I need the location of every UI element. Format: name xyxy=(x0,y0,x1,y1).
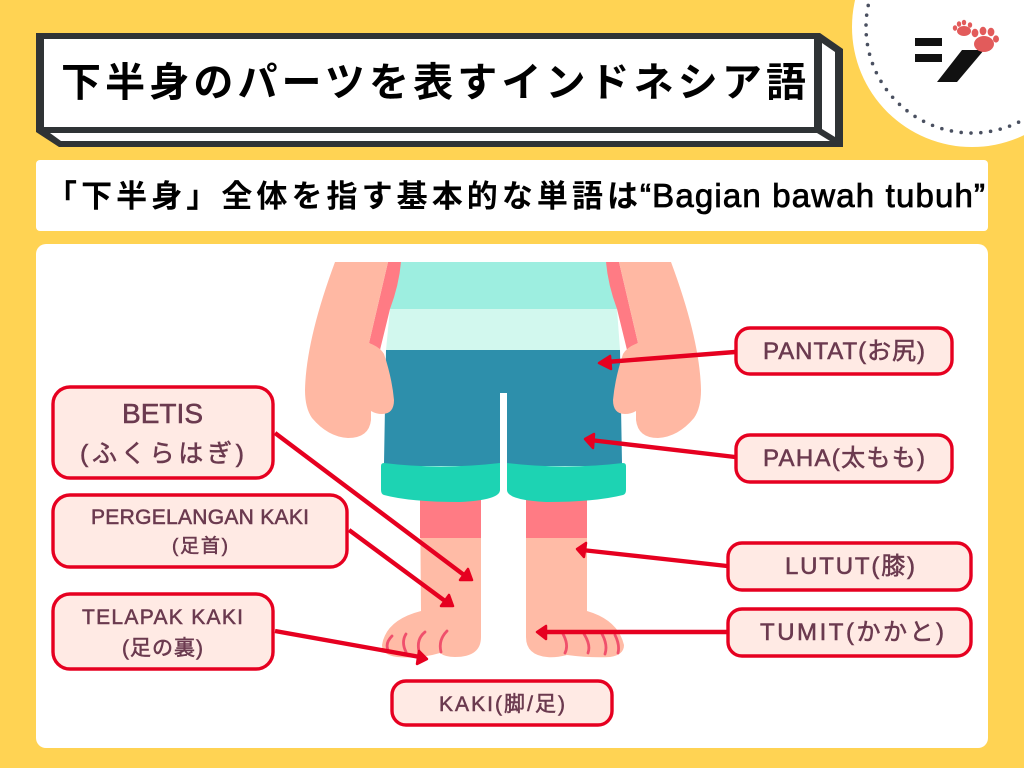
label: TELAPAK KAKI: (足の裏) xyxy=(122,637,203,660)
cuffs xyxy=(381,463,626,502)
subtitle panel xyxy=(36,160,988,231)
label: PERGELANGAN KAKI xyxy=(53,495,347,567)
label: TUMIT xyxy=(728,609,971,656)
label: PAHA: PAHA(太もも) xyxy=(763,445,925,472)
arrow: LUTUT xyxy=(577,543,727,566)
subtitle panel: “Bagian bawah tubuh” xyxy=(640,177,985,214)
label: TELAPAK KAKI: TELAPAK KAKI xyxy=(82,606,243,629)
label: PERGELANGAN KAKI: (足首) xyxy=(172,535,228,557)
legs xyxy=(382,490,624,658)
label: KAKI: KAKI(脚/足) xyxy=(439,693,565,716)
title banner xyxy=(36,33,843,147)
shirt xyxy=(386,262,620,350)
label: BETIS: BETIS xyxy=(122,398,203,429)
subtitle panel: 「下半身」全体を指す基本的な単語は xyxy=(46,171,638,216)
label: TELAPAK KAKI xyxy=(53,594,273,669)
arrow: TELAPAK xyxy=(275,631,427,664)
main panel xyxy=(36,244,988,748)
label: PERGELANGAN KAKI: PERGELANGAN KAKI xyxy=(91,506,309,529)
arrow: PERGELANGAN xyxy=(349,530,453,606)
label: PANTAT: PANTAT(お尻) xyxy=(763,338,925,365)
toes xyxy=(387,631,619,655)
arms xyxy=(305,262,701,438)
label: BETIS xyxy=(53,387,273,478)
label: PAHA xyxy=(736,435,952,482)
title banner: 下半身のパーツを表すインドネシア語 xyxy=(61,50,806,108)
arrow: PANTAT xyxy=(599,352,735,369)
arrow: PAHA xyxy=(585,434,735,457)
body illustration xyxy=(305,262,701,658)
sleeves xyxy=(369,262,638,350)
shorts xyxy=(384,350,622,466)
label: LUTUT: LUTUT(膝) xyxy=(785,553,915,580)
label: KAKI xyxy=(392,681,612,725)
label: BETIS: (ふくらはぎ) xyxy=(80,440,244,468)
arrow: BETIS xyxy=(275,433,472,580)
logo badge xyxy=(852,0,1024,147)
label: PANTAT xyxy=(736,328,952,374)
arrow: TUMIT xyxy=(537,626,727,639)
label: TUMIT: TUMIT(かかと) xyxy=(760,619,944,646)
label: LUTUT xyxy=(728,543,971,590)
